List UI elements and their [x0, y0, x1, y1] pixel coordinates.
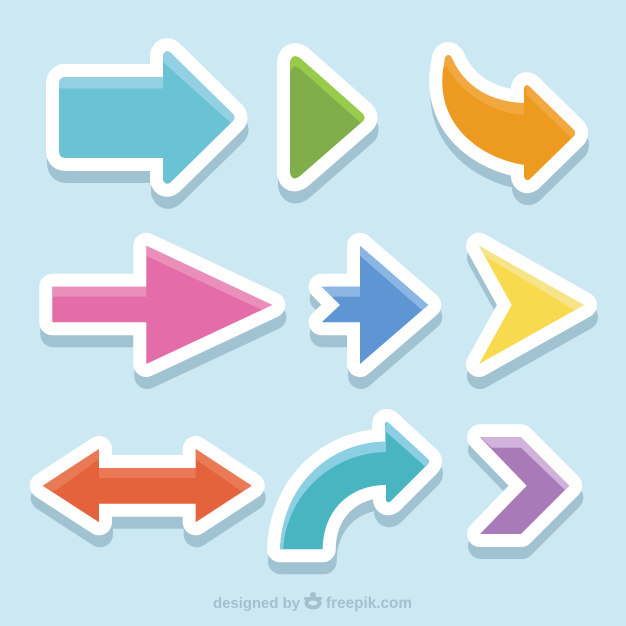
- credit text: designed by: designed by: [213, 595, 301, 612]
- arrow: purple chevron: [475, 432, 575, 546]
- icon: freepik mascot: [304, 592, 322, 610]
- arrow: blue notched arrow: [318, 240, 434, 376]
- credit text: freepik.com: freepik.com: [326, 595, 412, 612]
- arrow: yellow dart: [474, 240, 592, 376]
- arrow: red double-headed arrow: [36, 440, 258, 534]
- arrow: blue block arrow: [55, 40, 242, 196]
- arrow: teal curved arrow: [270, 412, 436, 561]
- arrow: orange curved arrow: [438, 45, 582, 192]
- arrow: green triangle: [285, 45, 372, 190]
- arrow: pink arrow: [50, 240, 278, 376]
- footer credit: [213, 592, 412, 612]
